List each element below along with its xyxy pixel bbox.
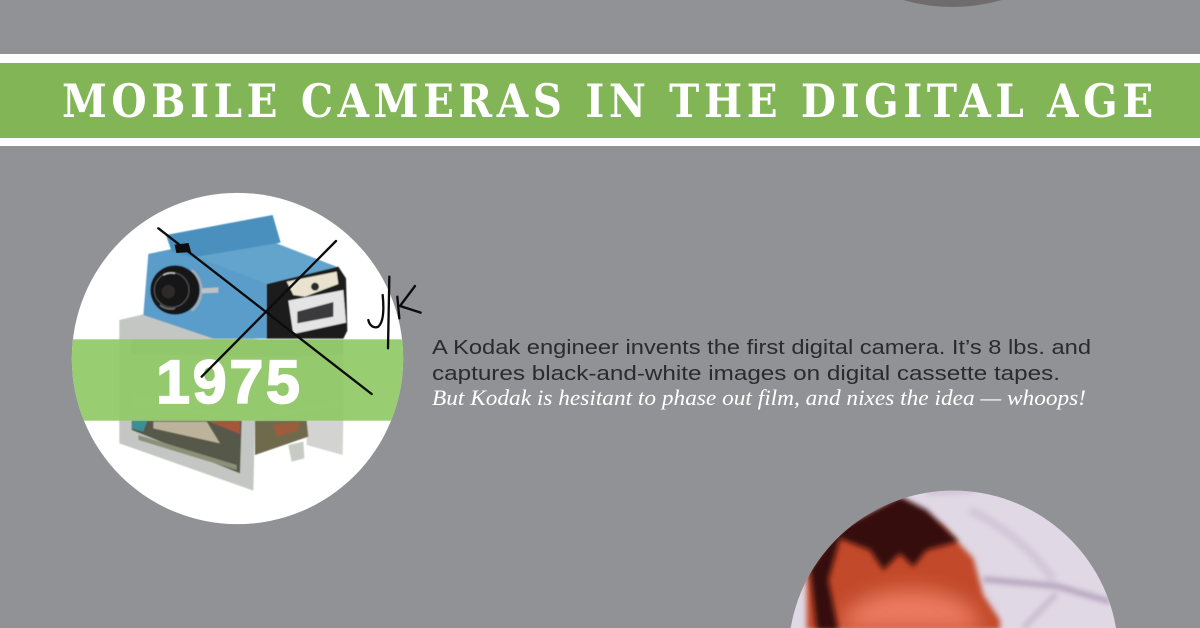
camera body — [148, 243, 338, 284]
description text: A Kodak engineer invents the first digital camera. It’s 8 lbs. and — [432, 337, 1091, 359]
lens — [150, 265, 200, 315]
baby hair — [810, 497, 958, 628]
baby photo circle — [791, 490, 1116, 628]
handwritten J|K — [368, 277, 421, 348]
cassette side — [267, 267, 347, 339]
Kodak camera photo — [119, 215, 347, 491]
script note: But Kodak is hesitant to phase out film, and nixes the idea — whoops! — [432, 385, 1086, 410]
banner title: MOBILE CAMERAS IN THE DIGITAL AGE — [62, 75, 1153, 129]
right plate — [307, 421, 343, 455]
description text: captures black-and-white images on digital cassette tapes. — [432, 363, 1060, 385]
crossed-out X — [158, 228, 372, 394]
metal chassis — [119, 314, 343, 491]
circuit boards — [132, 421, 242, 473]
blanket folds — [927, 490, 1110, 628]
section banner — [0, 54, 1200, 146]
year band — [72, 339, 403, 421]
previous camera photo fragment — [903, 0, 1002, 7]
description text — [432, 337, 1091, 410]
1975 circle: Kodak camera — [72, 193, 421, 524]
year label: 1975 — [156, 347, 300, 416]
baby face — [807, 500, 1000, 628]
